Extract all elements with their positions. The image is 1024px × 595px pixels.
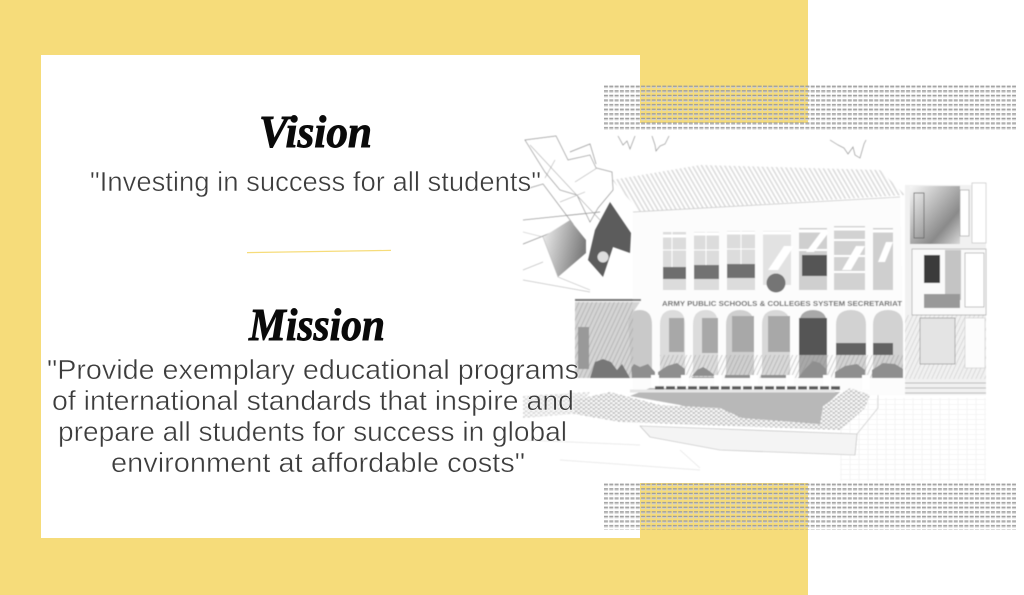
planters and shrubs: [628, 361, 903, 390]
treetop sketches: [618, 136, 866, 158]
heading: Mission: Mission: [248, 299, 385, 350]
yellow background block: [0, 0, 808, 595]
sky hatching: [612, 165, 905, 212]
dotted band: top: [604, 85, 1016, 130]
plaza paving: [840, 398, 986, 481]
white text panel: [41, 55, 640, 538]
crest logo: [766, 274, 786, 292]
mission statement: [47, 354, 579, 478]
garden bed with flowers: [523, 388, 878, 470]
heading: Vision: Vision: [259, 106, 372, 157]
facade: [628, 197, 905, 395]
vision statement: "Investing in success for all students": [90, 166, 541, 197]
building name sign: ARMY PUBLIC SCHOOLS & COLLEGES SYSTEM SECRETARIAT: [662, 299, 902, 308]
ground floor arches: [628, 310, 903, 378]
adjoining shop building on the right: [905, 183, 986, 395]
upper windows: [663, 226, 893, 290]
mission statement: environment at affordable costs": [111, 447, 525, 478]
mission statement: of international standards that inspire and: [52, 385, 574, 416]
divider line: [247, 250, 391, 253]
foreground leaves: [523, 136, 631, 292]
left annex building: [575, 300, 641, 378]
pencil sketch of the secretariat building: [523, 136, 986, 481]
dotted band: bottom: [604, 483, 1016, 530]
white clearing behind the building: [640, 123, 808, 483]
mission statement: "Provide exemplary educational programs: [47, 354, 579, 385]
mission statement: prepare all students for success in global: [58, 416, 567, 447]
